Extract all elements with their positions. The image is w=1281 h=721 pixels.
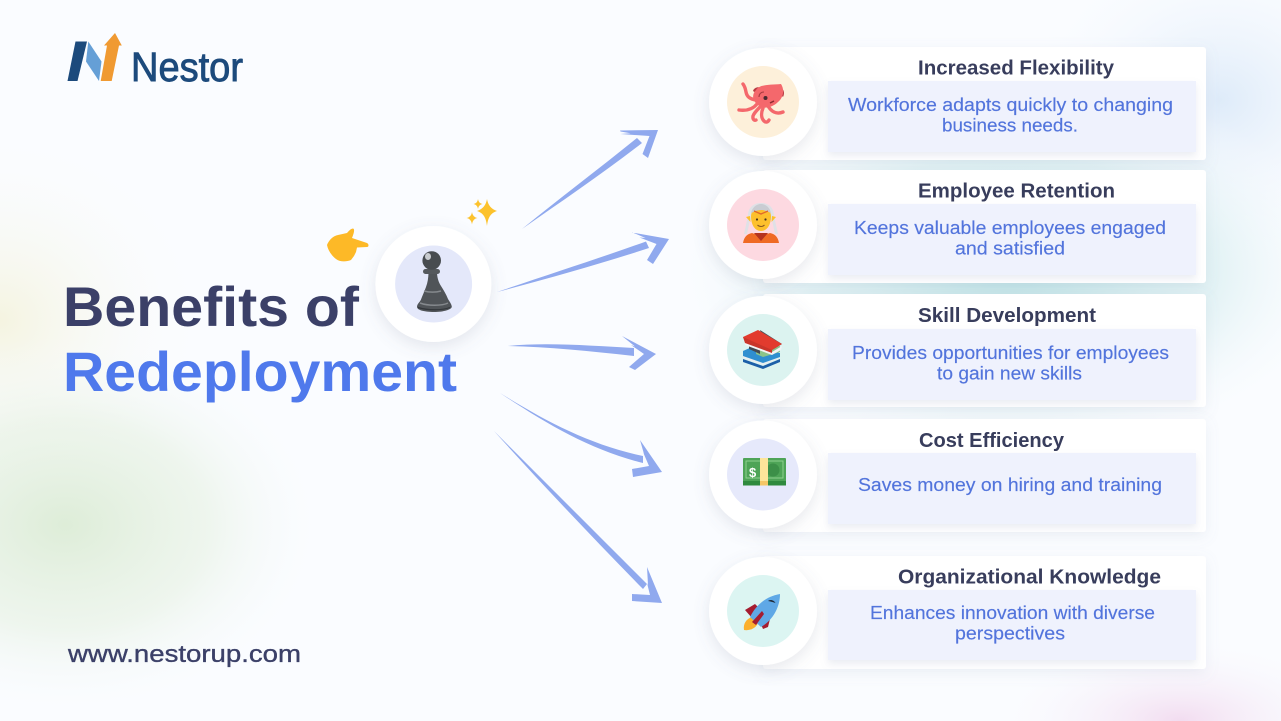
description box: and satisfied xyxy=(955,238,1065,258)
arrow 5 xyxy=(494,431,662,603)
icon badge: octopus xyxy=(709,48,817,156)
description box xyxy=(828,204,1196,275)
description box xyxy=(828,590,1196,660)
title xyxy=(63,275,457,403)
icon: sparkles xyxy=(466,199,497,226)
arrow 1 xyxy=(522,130,658,229)
heading: Organizational Knowledge xyxy=(898,566,1161,588)
description box: to gain new skills xyxy=(937,364,1082,384)
arrow 4 xyxy=(500,393,662,477)
panel: Employee Retention xyxy=(709,170,1206,283)
title: Benefits of xyxy=(63,275,359,338)
heading: Increased Flexibility xyxy=(918,58,1115,80)
central pawn badge xyxy=(375,226,491,342)
description box: Workforce adapts quickly to changing xyxy=(848,95,1173,115)
icon: pointing hand xyxy=(327,228,368,261)
logo: Nestor xyxy=(68,33,243,90)
description box: business needs. xyxy=(942,116,1078,136)
heading: Skill Development xyxy=(918,305,1096,327)
icon badge: money xyxy=(709,420,817,528)
icon badge: rocket xyxy=(709,557,817,665)
panel: Increased Flexibility xyxy=(709,47,1206,160)
arrow 3 xyxy=(508,336,656,370)
description box: perspectives xyxy=(955,624,1065,644)
icon badge: elf xyxy=(709,171,817,279)
title: Redeployment xyxy=(63,340,457,403)
description box: Enhances innovation with diverse xyxy=(870,603,1155,623)
description box xyxy=(828,81,1196,152)
logo: Nestor: Nestor xyxy=(131,44,243,90)
description box xyxy=(828,453,1196,524)
panel: Cost Efficiency xyxy=(709,419,1206,532)
website url: www.nestorup.com xyxy=(67,641,301,668)
arrow 2 xyxy=(497,232,669,292)
description box xyxy=(828,329,1196,400)
icon: chess pawn xyxy=(417,251,452,312)
panel: Organizational Knowledge xyxy=(709,556,1206,669)
description box: Provides opportunities for employees xyxy=(852,343,1169,363)
icon badge: money: $ xyxy=(749,465,757,480)
icon badge: books xyxy=(709,296,817,404)
heading: Employee Retention xyxy=(918,180,1115,202)
description box: Keeps valuable employees engaged xyxy=(854,218,1166,238)
panel: Skill Development xyxy=(709,294,1206,407)
heading: Cost Efficiency xyxy=(919,430,1065,452)
description box: Saves money on hiring and training xyxy=(858,475,1162,495)
